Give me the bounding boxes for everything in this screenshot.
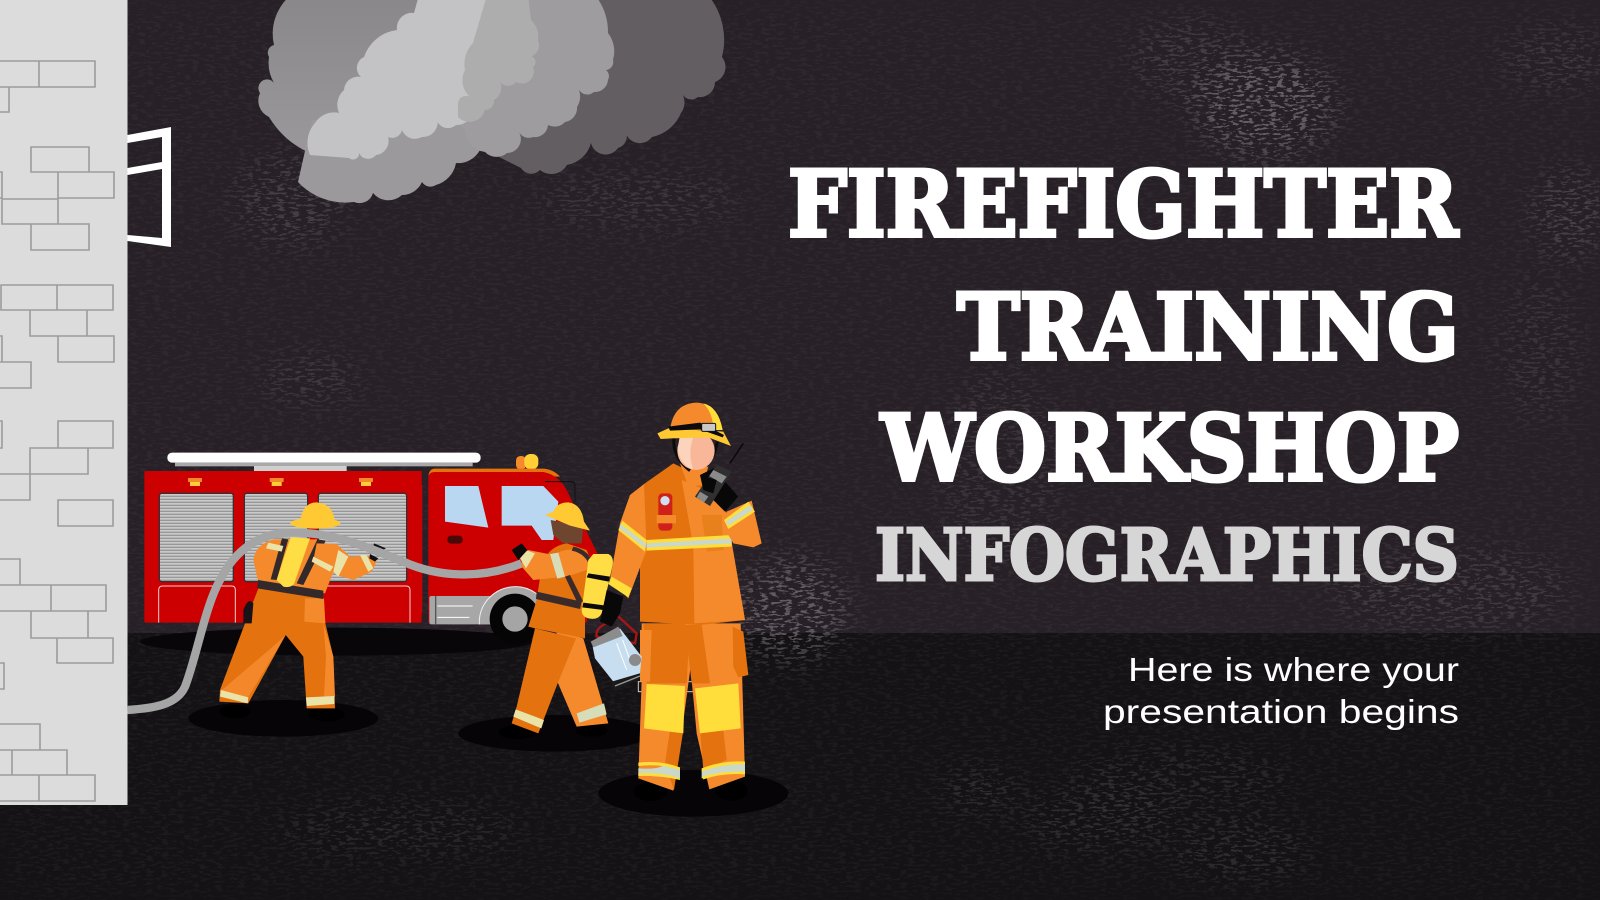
shadow <box>598 770 788 817</box>
smoke: light grey centre puff <box>458 0 539 122</box>
smoke: left grey puff <box>258 0 540 153</box>
left arm <box>608 484 647 598</box>
coat sleeve <box>520 550 590 580</box>
shadow <box>458 715 652 752</box>
firefighter with hose <box>188 502 386 737</box>
title line: workshop: WORKSHOP <box>880 396 1459 502</box>
window frame <box>128 127 171 247</box>
truck side lights <box>188 478 373 486</box>
firefighting scene <box>127 403 788 817</box>
title line: firefighter: FIREFIGHTER <box>788 152 1459 258</box>
right forearm <box>723 501 762 547</box>
title <box>788 152 1459 597</box>
second firefighter <box>458 502 652 752</box>
main firefighter <box>591 403 788 817</box>
badge <box>657 493 676 531</box>
hand holding mask <box>600 590 623 627</box>
smoke: dark back puff <box>485 0 725 174</box>
background floor <box>0 633 1600 900</box>
smoke: right mid puff <box>457 0 614 157</box>
trousers <box>638 623 748 791</box>
fire truck <box>140 453 597 656</box>
building wall <box>0 0 128 805</box>
harness <box>257 538 326 599</box>
boots <box>634 781 748 801</box>
boots <box>498 725 608 739</box>
roller shutters <box>159 493 407 582</box>
lower lockers <box>159 586 410 623</box>
helmet <box>545 502 590 531</box>
bricks <box>0 61 114 801</box>
coat <box>253 539 340 593</box>
truck step <box>429 596 493 624</box>
air tank <box>582 554 613 619</box>
smoke: lower puff <box>298 120 480 203</box>
title line: infographics: INFOGRAPHICS <box>875 513 1459 597</box>
arm <box>266 543 386 580</box>
legs gap <box>638 682 693 692</box>
truck cab <box>422 469 597 623</box>
fire hose <box>127 533 522 710</box>
subtitle line 2: presentation begins <box>1103 693 1459 730</box>
trousers <box>512 628 608 733</box>
shadow <box>188 700 378 737</box>
ladder <box>167 453 481 471</box>
breathing mask <box>591 613 642 692</box>
subtitle <box>1103 651 1459 730</box>
chest stripe <box>647 535 732 551</box>
trousers <box>219 588 335 708</box>
helmet <box>290 502 340 529</box>
air tank <box>277 537 310 587</box>
truck rear body <box>144 471 422 623</box>
front wheel <box>479 587 550 644</box>
title line: training: TRAINING <box>957 275 1459 381</box>
background wall <box>0 0 1600 633</box>
beacon <box>516 454 538 469</box>
coat <box>528 543 593 638</box>
knee patches <box>644 683 741 733</box>
head <box>551 520 583 543</box>
truck shadow <box>140 628 533 656</box>
glove <box>512 543 527 560</box>
head <box>674 431 717 487</box>
boots <box>220 705 345 721</box>
radio and glove <box>695 443 743 512</box>
smoke cloud <box>258 0 725 203</box>
harness <box>536 547 594 609</box>
helmet <box>657 403 731 446</box>
smoke: pale puff <box>307 0 487 160</box>
coat <box>640 463 745 625</box>
subtitle line 1: Here is where your <box>1128 651 1459 688</box>
